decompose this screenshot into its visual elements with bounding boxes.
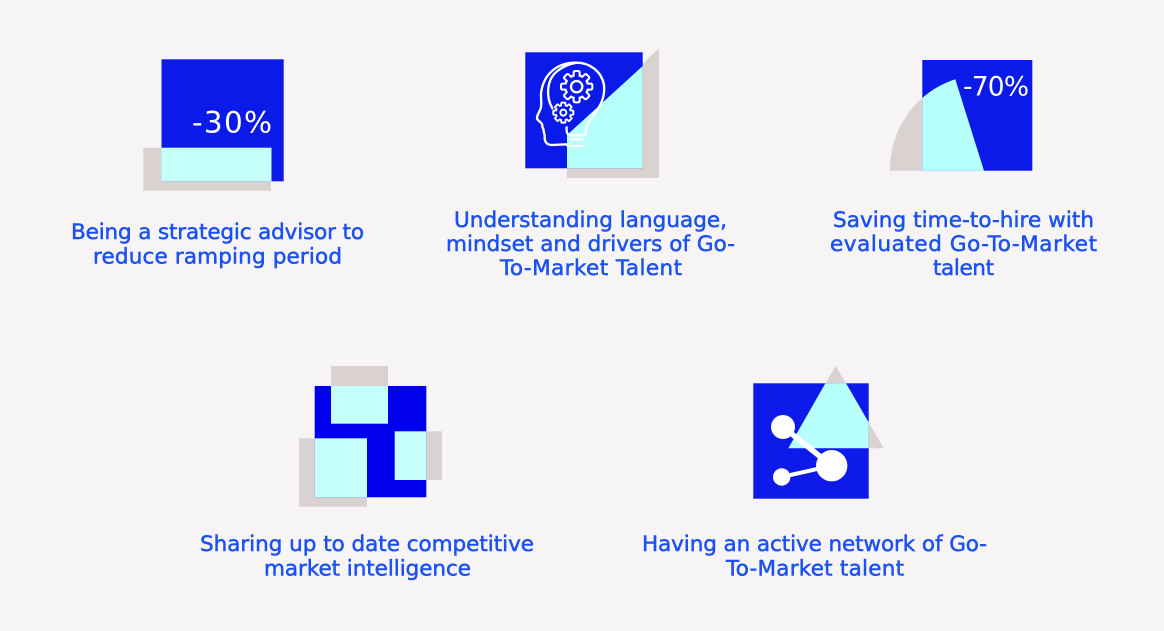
panel: strategic advisor: [71, 59, 364, 269]
icon: head with gears: [525, 48, 659, 178]
caption: time to hire: Saving time-to-hire with: [833, 208, 1094, 233]
icon: minus 30 percent: -30%: [192, 105, 272, 139]
icon: minus 70 percent pie: [890, 60, 1032, 171]
caption: market intelligence: [200, 532, 534, 582]
caption: strategic advisor: reduce ramping period: [93, 244, 342, 270]
panel: time to hire: [830, 60, 1097, 281]
caption: market intelligence: market intelligence: [264, 556, 471, 582]
panel: active network: [642, 366, 987, 582]
caption: strategic advisor: [71, 220, 364, 270]
caption: time to hire: [830, 208, 1097, 281]
caption: language and mindset: To-Market Talent: [499, 256, 682, 281]
large gear: [560, 70, 593, 103]
caption: strategic advisor: Being a strategic advisor to: [71, 220, 364, 245]
caption: language and mindset: mindset and drivers of Go-: [446, 232, 735, 257]
panel: market intelligence: [200, 366, 534, 582]
small gear: [552, 102, 574, 124]
panel: language and mindset: [446, 48, 735, 281]
icon: minus 30 percent: [143, 59, 284, 191]
caption: time to hire: talent: [933, 256, 994, 281]
caption: time to hire: evaluated Go-To-Market: [830, 232, 1097, 257]
caption: active network: To-Market talent: [725, 556, 904, 582]
caption: market intelligence: Sharing up to date competitive: [200, 532, 534, 557]
caption: language and mindset: [446, 208, 735, 281]
caption: active network: [642, 532, 987, 582]
icon: network nodes and triangle: [753, 366, 884, 499]
icon: overlapping squares: [299, 366, 442, 507]
caption: language and mindset: Understanding language,: [454, 208, 727, 233]
icon: minus 70 percent pie: -70%: [963, 72, 1029, 103]
caption: active network: Having an active network of Go-: [642, 532, 987, 557]
